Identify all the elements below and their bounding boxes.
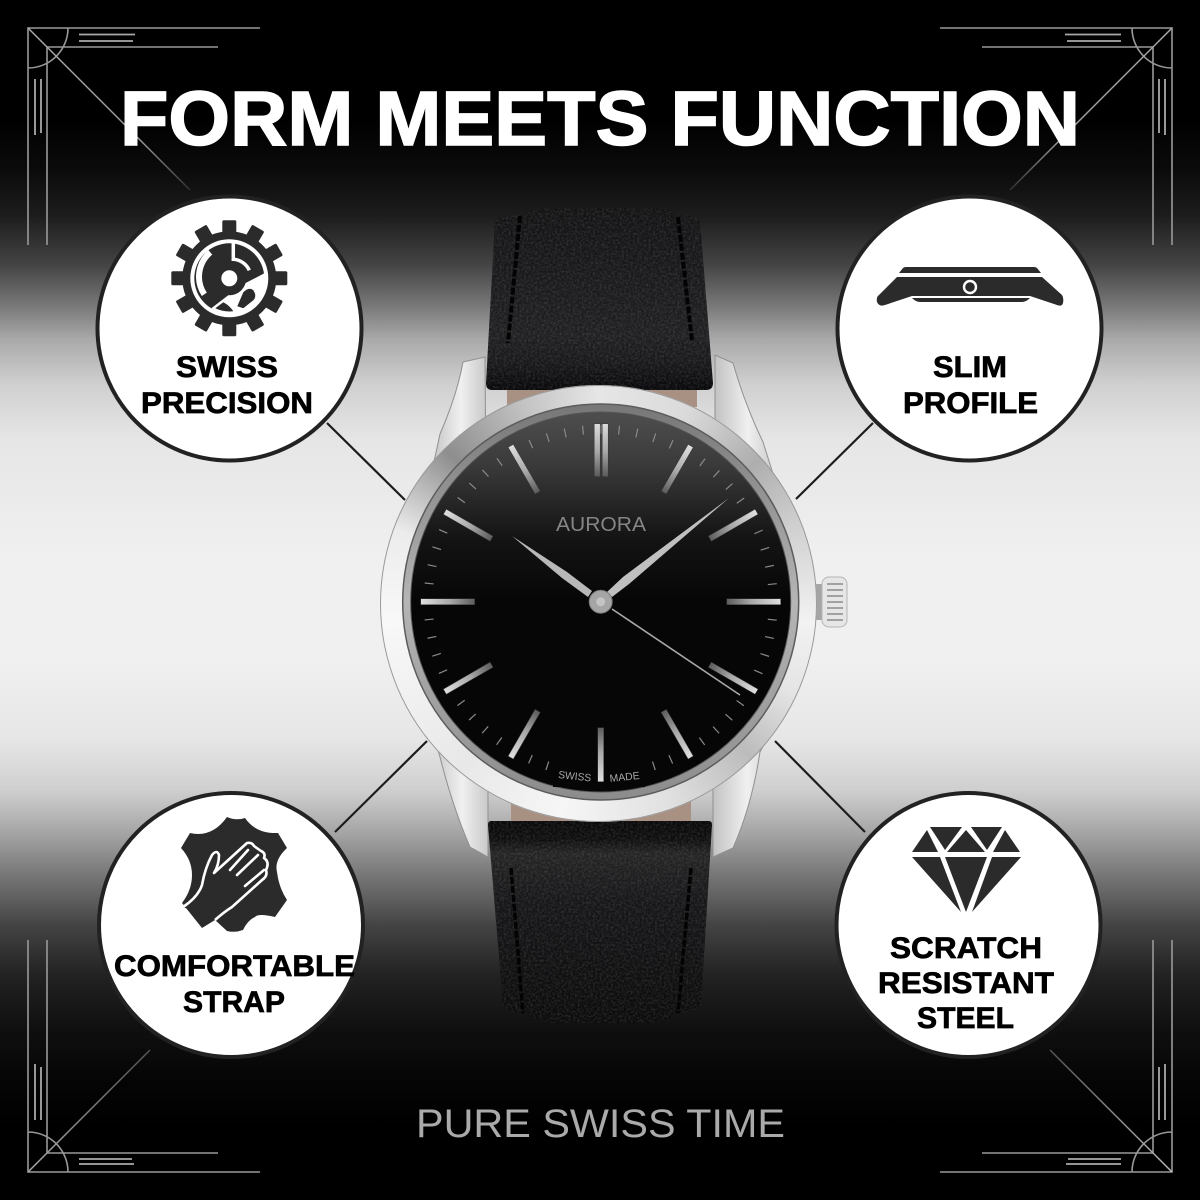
dial text: SWISS MADE: MADE — [609, 770, 640, 785]
hour markers — [421, 424, 781, 782]
label: scratch resistant steel — [878, 932, 1054, 1035]
watch case — [380, 385, 817, 822]
label: slim profile — [903, 351, 1038, 420]
icon: leather with hand — [181, 817, 287, 932]
panel: comfortable strap — [97, 791, 365, 1059]
label: swiss precision: SWISS — [176, 351, 278, 384]
strap: top — [486, 208, 713, 390]
minute ticks — [428, 429, 773, 774]
label: slim profile: SLIM — [933, 351, 1007, 384]
label: comfortable strap — [114, 950, 355, 1019]
label: slim profile: PROFILE — [903, 387, 1038, 420]
icon: gear — [171, 220, 287, 336]
crown — [815, 577, 847, 627]
dial text: SWISS MADE: SWISS — [558, 769, 592, 784]
watch hands — [512, 498, 740, 695]
panel: swiss precision — [96, 194, 364, 462]
dial — [402, 403, 800, 801]
panel: scratch resistant steel — [834, 791, 1102, 1059]
icon: diamond — [912, 827, 1021, 912]
dial brand: AURORA: AURORA — [556, 513, 646, 536]
panel: slim profile — [836, 194, 1104, 462]
dial text: SWISS MADE — [558, 769, 640, 785]
label: swiss precision: PRECISION — [141, 387, 313, 420]
tan strap lining — [507, 385, 697, 824]
strap: bottom — [488, 821, 712, 1023]
title: FORM MEETS FUNCTION — [120, 76, 1080, 160]
label: comfortable strap: COMFORTABLE — [114, 950, 355, 983]
label: swiss precision — [141, 351, 313, 420]
label: comfortable strap: STRAP — [183, 986, 285, 1019]
label: scratch resistant steel: SCRATCH — [890, 932, 1042, 965]
lugs — [430, 355, 775, 857]
label: scratch resistant steel: RESISTANT — [878, 967, 1054, 1000]
label: scratch resistant steel: STEEL — [917, 1002, 1014, 1035]
watch — [380, 208, 848, 1023]
icon: slim watch profile — [877, 267, 1063, 306]
tagline: PURE SWISS TIME — [416, 1102, 785, 1145]
